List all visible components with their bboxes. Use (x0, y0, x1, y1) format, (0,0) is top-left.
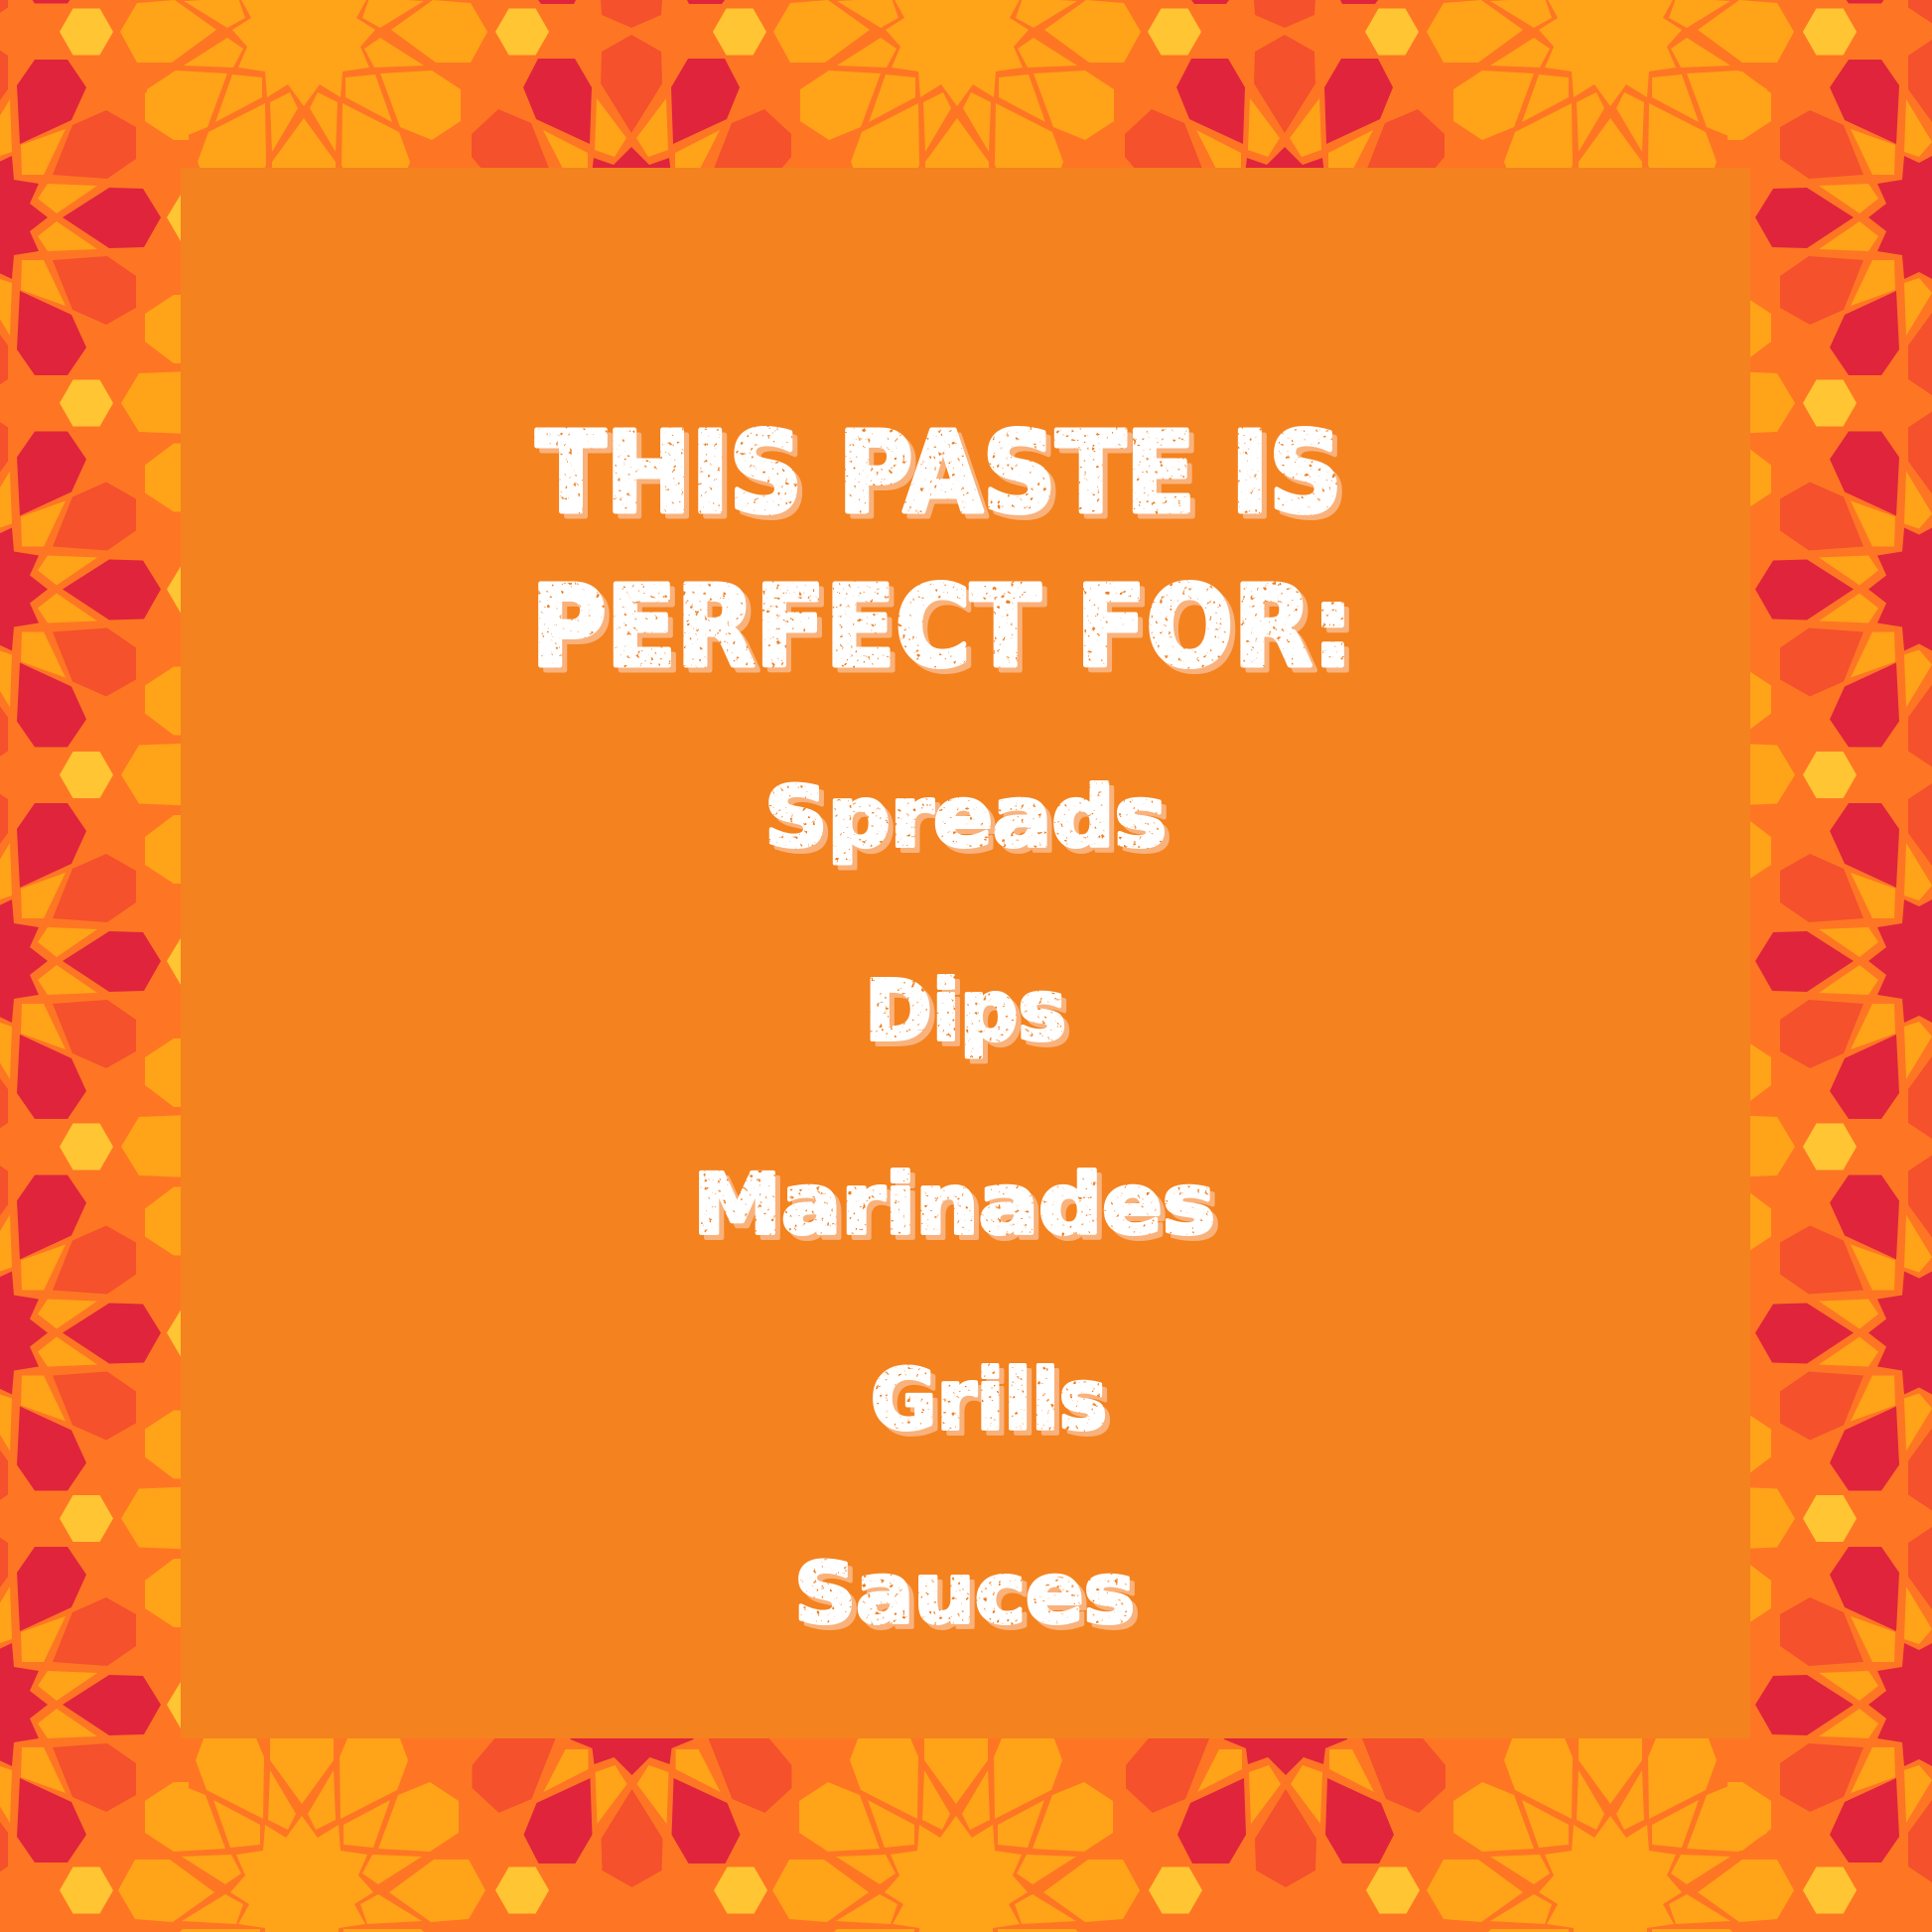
panel: centre orange square (181, 168, 1750, 1738)
top border band (120, 0, 1857, 194)
list of uses (693, 768, 1215, 1642)
right border band (1727, 0, 1932, 1914)
list item: Dips: Dips (865, 962, 1066, 1059)
list item: Spreads: Spreads (764, 768, 1167, 866)
title line 2: PERFECT FOR: (531, 563, 1353, 692)
bottom border band (118, 1728, 1857, 1932)
left border band (0, 0, 189, 1914)
list item: Grills: Grills (871, 1351, 1107, 1449)
title (531, 409, 1353, 692)
list item: Marinades: Marinades (693, 1156, 1215, 1253)
title line 1: THIS PASTE IS (536, 409, 1342, 538)
list item: Sauces: Sauces (794, 1545, 1135, 1642)
